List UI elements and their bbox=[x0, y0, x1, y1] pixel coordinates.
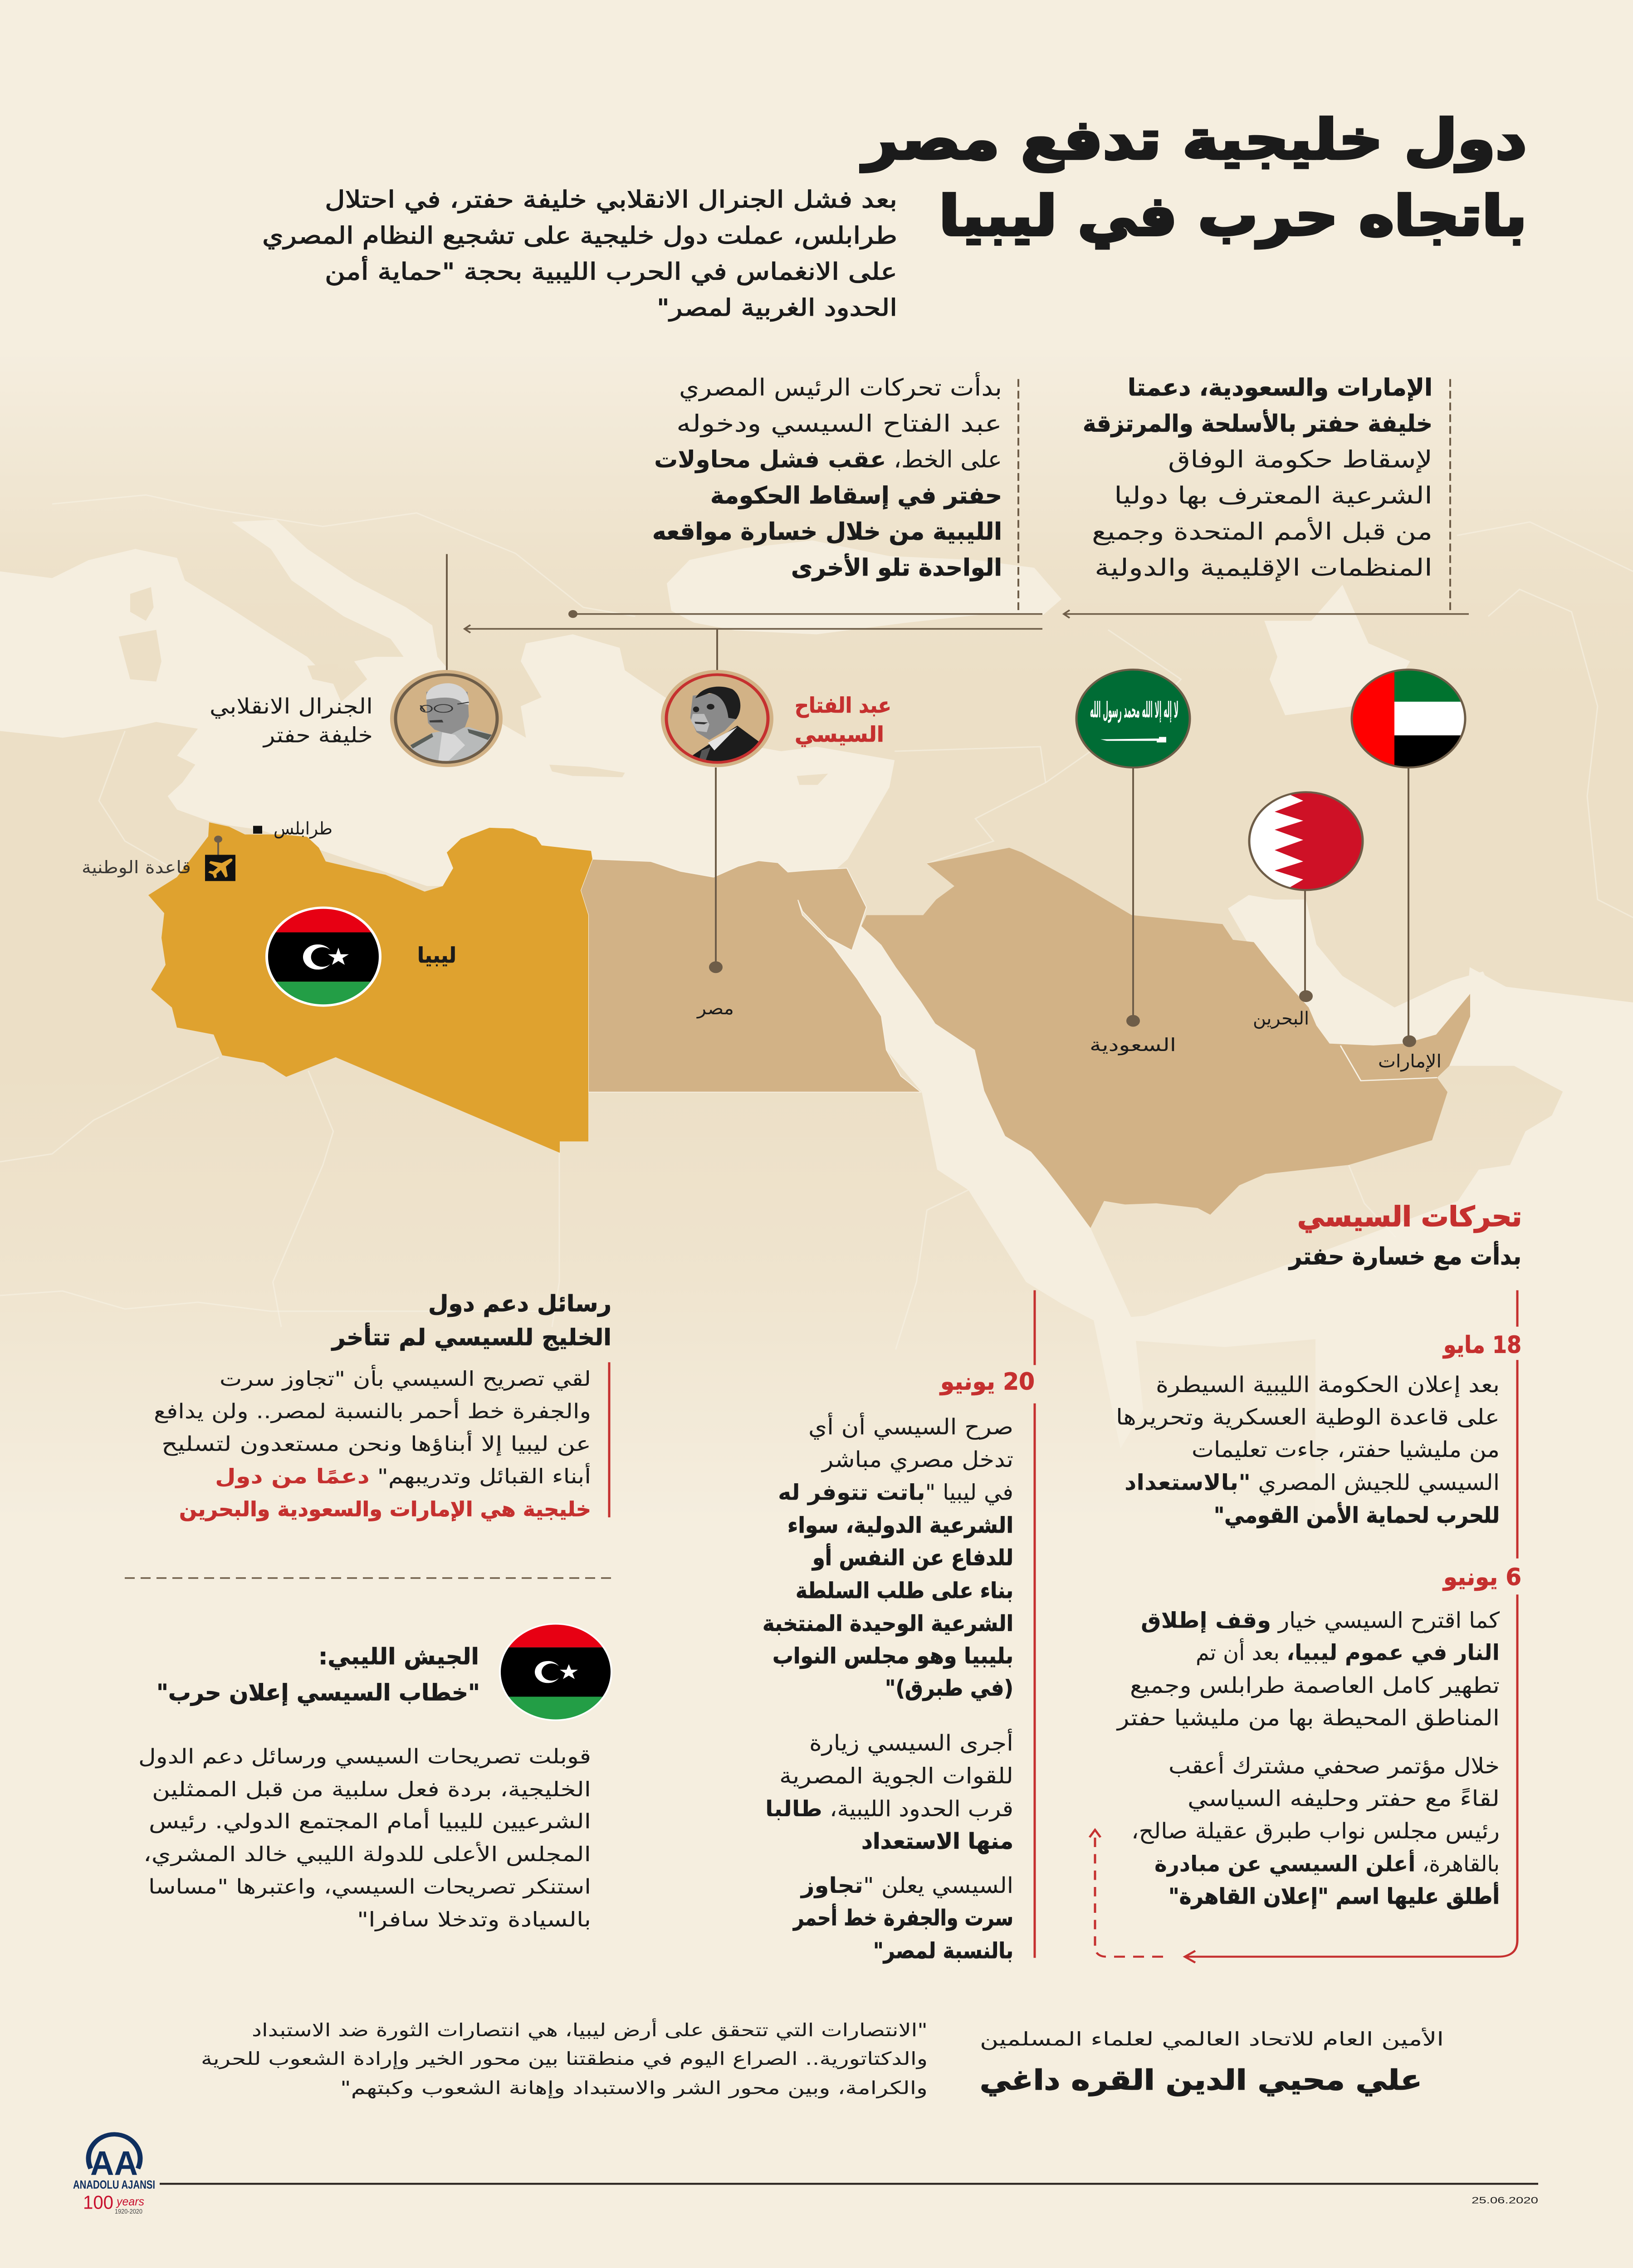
title: دول خليجية تدفع مصر bbox=[861, 108, 1527, 172]
quote text bbox=[201, 2018, 928, 2099]
text: Emirates and Saudi support: من قبل الأمم المتحدة وجميع bbox=[1092, 517, 1433, 546]
text: Sisi moves: على الخط، عقب فشل محاولات bbox=[654, 446, 1002, 474]
Sisi label bbox=[795, 693, 891, 747]
timeline entry: 20 June bbox=[763, 1369, 1035, 1964]
panel: Gulf support messages: لقي تصريح السيسي بأن "تجاوز سرت bbox=[220, 1365, 591, 1391]
map: Libya bbox=[148, 822, 592, 1153]
text: Sisi moves bbox=[652, 372, 1002, 582]
marker: Tripoli bbox=[253, 818, 332, 839]
panel: Gulf support messages: رسائل دعم دول bbox=[428, 1290, 611, 1317]
timeline entry: 20 June: سرت والجفرة خط أحمر bbox=[792, 1904, 1013, 1931]
panel: Libyan army response: استنكر تصريحات السيسي، واعتبرها "مساسا bbox=[148, 1875, 591, 1899]
flag: Libya on map bbox=[263, 904, 386, 1009]
Sisi connector to Egypt bbox=[709, 767, 723, 973]
country labels: السعودية bbox=[1090, 1035, 1176, 1056]
flag: Bahrain with connector bbox=[1247, 787, 1365, 1002]
timeline entry: 18 May: بعد إعلان الحكومة الليبية السيطرة bbox=[1156, 1372, 1500, 1398]
Haftar label: خليفة حفتر bbox=[262, 723, 373, 748]
logo: Anadolu Agency: AA bbox=[90, 2144, 138, 2182]
Mediterranean islands bbox=[119, 587, 828, 785]
timeline entry: 20 June: الشرعية الوحيدة المنتخبة bbox=[763, 1611, 1013, 1636]
timeline entry: 20 June: 20 يونيو bbox=[939, 1369, 1035, 1396]
panel: Libyan army response: المجلس الأعلى للدولة الليبي خالد المشري، bbox=[143, 1842, 591, 1866]
timeline entry: 18 May: السيسي للجيش المصري "بالاستعداد bbox=[1125, 1470, 1500, 1496]
text: Sisi moves: الليبية من خلال خسارة مواقعه bbox=[652, 518, 1002, 546]
panel: Libyan army response: قوبلت تصريحات السيسي ورسائل دعم الدول bbox=[138, 1745, 591, 1768]
label: Libya: ليبيا bbox=[417, 943, 456, 968]
timeline entry: 18 May: للحرب لحماية الأمن القومي" bbox=[1214, 1501, 1500, 1528]
Arabian Sea bbox=[1094, 967, 1633, 1527]
quote attribution: علي محيي الدين القره داغي bbox=[980, 2064, 1422, 2096]
map background: land and seas bbox=[0, 215, 1633, 1527]
Sisi label: عبد الفتاح bbox=[795, 693, 891, 718]
country labels: مصر bbox=[696, 998, 734, 1018]
UAE border bbox=[1340, 1046, 1437, 1081]
timeline entry: 6 June: المناطق المحيطة بها من مليشيا حفتر bbox=[1116, 1705, 1500, 1731]
timeline entry: 6 June: النار في عموم ليبيا، بعد أن تم bbox=[1196, 1638, 1500, 1665]
text: لا إله إلا الله محمد رسول الله bbox=[1090, 697, 1178, 723]
map: Saudi Arabia and Gulf states bbox=[861, 848, 1470, 1228]
timeline entry: 20 June: أجرى السيسي زيارة bbox=[809, 1729, 1013, 1756]
text: Emirates and Saudi support: لإسقاط حكومة الوفاق bbox=[1168, 446, 1433, 474]
text: Sisi moves: حفتر في إسقاط الحكومة bbox=[710, 482, 1002, 509]
heading: Sisi's moves: تحركات السيسي bbox=[1297, 1201, 1522, 1233]
Mediterranean bbox=[0, 520, 895, 886]
timeline entry: 6 June: أطلق عليها اسم "إعلان القاهرة" bbox=[1169, 1882, 1500, 1909]
timeline: red lines bbox=[1035, 1290, 1517, 1963]
panel: Libyan army response bbox=[138, 1643, 591, 1931]
marker: Al-Watiya airbase: قاعدة الوطنية bbox=[82, 857, 191, 877]
flag: UAE with connector bbox=[1352, 670, 1465, 1047]
timeline entry: 20 June: للدفاع عن النفس أو bbox=[811, 1543, 1013, 1570]
Black Sea bbox=[667, 540, 1061, 634]
flag: Saudi Arabia with connector bbox=[1076, 670, 1190, 1026]
timeline entry: 6 June: لقاءً مع حفتر وحليفه السياسي bbox=[1188, 1786, 1500, 1811]
Red Sea bbox=[798, 900, 1143, 1449]
panel: Gulf support messages: أبناء القبائل وتدريبهم" دعمًا من دول bbox=[215, 1463, 591, 1488]
timeline entry: 20 June: بليبيا وهو مجلس النواب bbox=[772, 1643, 1013, 1669]
text: Emirates and Saudi support: خليفة حفتر بالأسلحة والمرتزقة bbox=[1083, 409, 1433, 437]
timeline entry: 18 May: 18 مايو bbox=[1442, 1331, 1521, 1359]
quote text: "الانتصارات التي تتحقق على أرض ليبيا، هي انتصارات الثورة ضد الاستبداد bbox=[252, 2018, 928, 2041]
text: Emirates and Saudi support: الإمارات والسعودية، دعمتا bbox=[1128, 374, 1433, 401]
panel: Libyan army response: الشرعيين لليبيا أمام المجتمع الدولي. رئيس bbox=[149, 1808, 591, 1833]
timeline entry: 20 June: بناء على طلب السلطة bbox=[796, 1578, 1013, 1603]
intro text: على الانغماس في الحرب الليبية بحجة "حماية أمن bbox=[325, 256, 897, 285]
text: Emirates and Saudi support: الشرعية المعترف بها دوليا bbox=[1114, 482, 1433, 509]
logo: Anadolu Agency: 1920-2020 bbox=[115, 2208, 142, 2215]
timeline entry: 20 June: الشرعية الدولية، سواء bbox=[787, 1512, 1013, 1538]
country labels: البحرين bbox=[1253, 1008, 1309, 1029]
timeline entry: 18 May: من مليشيا حفتر، جاءت تعليمات bbox=[1192, 1437, 1500, 1462]
timeline entry: 20 June: صرح السيسي أن أي bbox=[808, 1413, 1013, 1440]
heading: Sisi's moves: بدأت مع خسارة حفتر bbox=[1288, 1241, 1521, 1270]
text: Emirates and Saudi support: المنظمات الإقليمية والدولية bbox=[1095, 554, 1433, 582]
title bbox=[861, 108, 1527, 249]
timeline entry: 20 June: (في طبرق)" bbox=[885, 1676, 1013, 1701]
date: 25.06.2020 bbox=[1472, 2195, 1538, 2205]
quote text: والكرامة، وبين محور الشر والاستبداد وإهانة الشعوب وكبتهم" bbox=[340, 2078, 928, 2099]
timeline entry: 20 June: السيسي يعلن "تجاوز bbox=[800, 1873, 1013, 1898]
intro text: طرابلس، عملت دول خليجية على تشجيع النظام المصري bbox=[262, 222, 897, 249]
panel: Gulf support messages: خليجية هي الإمارات والسعودية والبحرين bbox=[179, 1498, 591, 1521]
footer rule bbox=[160, 2183, 1538, 2185]
Haftar label: الجنرال الانقلابي bbox=[210, 694, 373, 719]
timeline entry: 20 June: بالنسبة لمصر" bbox=[873, 1938, 1013, 1964]
text: Sisi moves: بدأت تحركات الرئيس المصري bbox=[679, 372, 1002, 401]
map: Egypt bbox=[581, 859, 921, 1092]
logo: Anadolu Agency bbox=[73, 2134, 155, 2215]
timeline entry: 20 June: تدخل مصري مباشر bbox=[821, 1447, 1013, 1472]
intro text: الحدود الغربية لمصر" bbox=[657, 294, 897, 322]
Haftar label bbox=[210, 694, 373, 748]
Haftar portrait with connector bbox=[390, 554, 503, 767]
timeline entry: 18 May bbox=[1116, 1331, 1521, 1528]
timeline entry: 6 June: رئيس مجلس نواب طبرق عقيلة صالح، bbox=[1131, 1818, 1500, 1844]
panel: Gulf support messages: عن ليبيا إلا أبناؤها ونحن مستعدون لتسليح bbox=[161, 1430, 591, 1456]
marker: Tripoli: طرابلس bbox=[274, 818, 332, 839]
timeline entry: 6 June: 6 يونيو bbox=[1442, 1564, 1521, 1591]
timeline entry: 6 June: خلال مؤتمر صحفي مشترك أعقب bbox=[1169, 1752, 1500, 1779]
timeline entry: 20 June: منها الاستعداد bbox=[861, 1828, 1013, 1854]
heading: Sisi's moves bbox=[1288, 1201, 1522, 1270]
Sisi portrait with connector bbox=[661, 629, 773, 767]
panel: Gulf support messages: الخليج للسيسي لم تتأخر bbox=[331, 1322, 611, 1350]
Caspian Sea bbox=[1264, 585, 1410, 715]
timeline entry: 20 June: للقوات الجوية المصرية bbox=[779, 1763, 1013, 1789]
logo: Anadolu Agency: years bbox=[116, 2195, 144, 2208]
timeline entry: 6 June bbox=[1116, 1564, 1521, 1909]
text: Sisi moves: الواحدة تلو الأخرى bbox=[791, 553, 1002, 582]
quote attribution: الأمين العام للاتحاد العالمي لعلماء المسلمين bbox=[980, 2027, 1444, 2050]
panel: Gulf support messages: والجفرة خط أحمر بالنسبة لمصر.. ولن يدافع bbox=[154, 1398, 591, 1423]
faint country borders bbox=[0, 495, 1633, 1349]
divider: dashed bbox=[125, 1577, 616, 1579]
intro text bbox=[262, 186, 897, 322]
Persian Gulf bbox=[1228, 895, 1514, 1066]
country labels bbox=[696, 998, 1442, 1072]
panel: Libyan army response: الخليجية، بردة فعل سلبية من قبل الممثلين bbox=[152, 1778, 591, 1801]
panel: Gulf support messages bbox=[154, 1290, 611, 1521]
timeline entry: 6 June: بالقاهرة، أعلن السيسي عن مبادرة bbox=[1154, 1849, 1500, 1877]
timeline entry: 18 May: على قاعدة الوطية العسكرية وتحريرها bbox=[1116, 1404, 1500, 1430]
marker: Al-Watiya airbase bbox=[82, 836, 235, 881]
timeline entry: 6 June: كما اقترح السيسي خيار وقف إطلاق bbox=[1141, 1608, 1500, 1633]
text: Emirates and Saudi support bbox=[1083, 374, 1433, 582]
intro text: بعد فشل الجنرال الانقلابي خليفة حفتر، في احتلال bbox=[325, 186, 897, 213]
text: Sisi moves: عبد الفتاح السيسي ودخوله bbox=[676, 410, 1002, 437]
panel: Libyan army response: "خطاب السيسي إعلان حرب" bbox=[156, 1679, 480, 1706]
logo: Anadolu Agency: ANADOLU AJANSI bbox=[73, 2178, 155, 2191]
timeline entry: 20 June: قرب الحدود الليبية، طالبا bbox=[765, 1796, 1013, 1822]
flag: Libya in panel bbox=[497, 1621, 615, 1723]
quote attribution bbox=[980, 2027, 1444, 2096]
panel: Libyan army response: الجيش الليبي: bbox=[318, 1643, 479, 1670]
title: باتجاه حرب في ليبيا bbox=[939, 184, 1527, 249]
quote text: والدكتاتورية.. الصراع اليوم في منطقتنا بين محور الخير وإرادة الشعوب للحرية bbox=[201, 2048, 928, 2069]
panel: Libyan army response: بالسيادة وتدخلا سافرا" bbox=[357, 1908, 591, 1931]
timeline entry: 20 June: في ليبيا "باتت تتوفر له bbox=[778, 1480, 1013, 1505]
logo: Anadolu Agency: 100 bbox=[83, 2192, 113, 2213]
country labels: الإمارات bbox=[1378, 1051, 1442, 1072]
connector lines from text columns bbox=[464, 379, 1469, 633]
Sisi label: السيسي bbox=[795, 722, 884, 747]
timeline entry: 6 June: تطهير كامل العاصمة طرابلس وجميع bbox=[1130, 1673, 1500, 1698]
